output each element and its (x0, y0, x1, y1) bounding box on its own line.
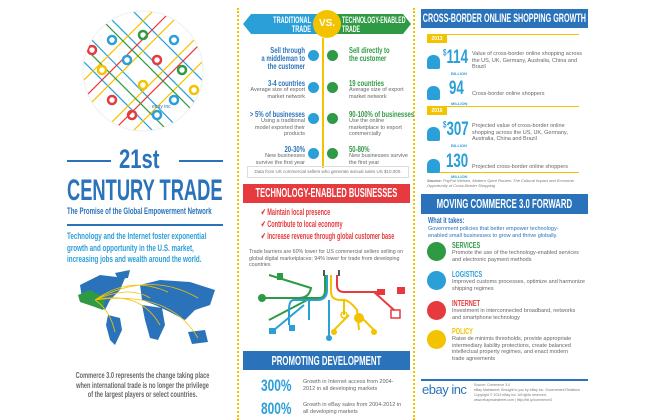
comparison rows: 19 countries (349, 78, 384, 88)
globe (82, 10, 204, 132)
panel: moving commerce (421, 194, 588, 402)
comparison rows: Sell through (270, 45, 305, 55)
stats: Cross-border online shoppers (472, 91, 544, 97)
caption: of the largest players or select countries. (88, 389, 197, 399)
header: CROSS-BORDER ONLINE SHOPPING GROWTH (423, 11, 586, 25)
comparison rows: 50-80% (349, 144, 370, 154)
stats: BILLION (451, 143, 467, 148)
checklist (261, 207, 394, 241)
header: traditional vs tech: TRADITIONAL (273, 15, 311, 25)
footer text: www.ebaymainstreet.com | http://bit.ly/commerce3 (474, 398, 552, 402)
comparison rows (250, 45, 414, 166)
intro text: Technology and the Internet foster exponential growth and opportunity in the U.S. market, increasing jobs and wealth around the world. (67, 231, 206, 265)
stats: BILLION (451, 71, 467, 76)
comparison rows: New businesses survive the first year (349, 153, 408, 166)
subtitle: The Promise of the Global Empowerment Network (67, 206, 212, 217)
panel: cross-border (421, 9, 588, 188)
stats (427, 47, 582, 179)
comparison rows: Using a traditional model exported their products (255, 118, 305, 137)
checklist: ✔ Contribute to local economy (261, 219, 343, 229)
stat 300% (261, 376, 394, 395)
stat 800%: Growth in eBay sales from 2004-2012 in all developing markets (303, 402, 401, 414)
policy items: SERVICES (452, 241, 480, 250)
panel: cross-border: 2016 (431, 108, 443, 114)
stats: 130 (446, 151, 468, 172)
panel: moving commerce: What it takes: (428, 216, 464, 225)
comparison rows: New businesses survive the first year (256, 153, 305, 166)
panel: middle column (237, 8, 415, 420)
stat 800% (261, 399, 401, 418)
footer text: Copyright © 2013 eBay Inc. All rights reserved. (474, 393, 547, 397)
data note (247, 166, 409, 178)
footer text: Source: Commerce 3.0 (474, 383, 510, 387)
checklist: ✔ Increase revenue through global customer base (261, 231, 394, 241)
header: traditional vs tech: TRADE (342, 24, 360, 34)
comparison rows: > 5% of businesses (250, 109, 305, 119)
title: century trade: CENTURY TRADE (67, 174, 223, 207)
logo: ebay inc: ebay inc (422, 382, 466, 397)
stats: 94 (449, 78, 464, 99)
caption (76, 370, 210, 399)
panel: moving commerce: MOVING COMMERCE 3.0 FORWARD (437, 196, 572, 211)
policy items: Raise de minimis thresholds, provide appropriate intermediary liability protections, create balanced intellectual property regimes, and enact modern trade agreements (452, 336, 571, 362)
policy items: Investment in interconnected broadband, networks and smartphone technology (452, 308, 575, 320)
globe: ebay inc (152, 104, 171, 110)
policy items: POLICY (452, 327, 473, 336)
checklist: ✔ Maintain local presence (261, 207, 330, 217)
comparison rows: Average size of export market network (250, 87, 305, 100)
banner: technology-enabled businesses (243, 184, 410, 203)
stats: $307 (443, 119, 469, 140)
trade barriers text: Trade barriers are 60% lower for US commercial sellers selling on global digital marketplaces; 94% lower for trade from developing countries (249, 249, 403, 268)
comparison rows: Average size of export market network (349, 87, 404, 100)
banner: technology-enabled businesses: TECHNOLOGY-ENABLED BUSINESSES (256, 186, 397, 200)
data note: Data from US commercial sellers who generate annual sales US $10,000. (254, 169, 402, 174)
header: traditional vs tech: VS. (319, 18, 335, 29)
comparison rows: Sell directly to (349, 45, 390, 55)
banner: promoting development: PROMOTING DEVELOPMENT (272, 353, 381, 368)
header: traditional vs tech: TECHNOLOGY-ENABLED (342, 15, 406, 25)
panel: cross-border: MILLION (451, 174, 467, 179)
header: traditional vs tech (243, 10, 411, 38)
footer text (474, 383, 580, 402)
policy items: Improved customs processes, optimize and harmonize shipping regimes (452, 279, 585, 292)
comparison rows: the customer (268, 61, 305, 71)
comparison rows: the customer (349, 53, 386, 63)
tree diagram (258, 270, 405, 341)
stats: MILLION (451, 101, 467, 106)
comparison rows: Use the online marketplace to export commercially (349, 118, 402, 137)
footer text: eBay Mainstreet: Brought to you by eBay Inc. Government Relations (474, 388, 580, 392)
caption: Commerce 3.0 represents the change taking place (76, 370, 209, 380)
policy items: INTERNET (452, 299, 480, 308)
panel: cross-border: 2013 (431, 36, 443, 42)
policy items: LOGISTICS (452, 270, 482, 279)
title: 21st: 21st (119, 144, 160, 174)
stats: Projected value of cross-border online shopping across the US, UK, Germany, Australia, China and Brazil (472, 123, 568, 142)
stat 800%: 800% (261, 399, 291, 418)
comparison rows: 20-30% (284, 144, 305, 154)
source: Source: PayPal Nielsen, Modern Spice Routes: The Cultural Impact and Economic Opportunity of Cross-Border Shopping (427, 178, 574, 188)
comparison rows: 3-4 countries (268, 78, 305, 88)
banner: promoting development (243, 351, 410, 370)
comparison rows: a middleman to (261, 53, 305, 63)
comparison rows: 90-100% of businesses (349, 109, 414, 119)
policy items: Promote the use of the technology-enabled services and electronic payment methods (452, 250, 579, 262)
panel: moving commerce: Government policies that better empower technology-enabled small businesses to grow and thrive globally. (428, 226, 559, 239)
caption: when international trade is no longer the privilege (76, 380, 209, 390)
world map (78, 270, 215, 345)
stats: Projected cross-border online shoppers (472, 164, 568, 170)
stat 300%: 300% (261, 376, 291, 395)
policy items (427, 241, 585, 362)
header: traditional vs tech: TRADE (292, 24, 311, 34)
stat 300%: Growth in Internet access from 2004-2012 in all developing markets (303, 379, 393, 392)
stats: Value of cross-border online shopping across the US, UK, Germany, Australia, China and Brazil (472, 51, 582, 70)
stats: $114 (443, 47, 468, 68)
